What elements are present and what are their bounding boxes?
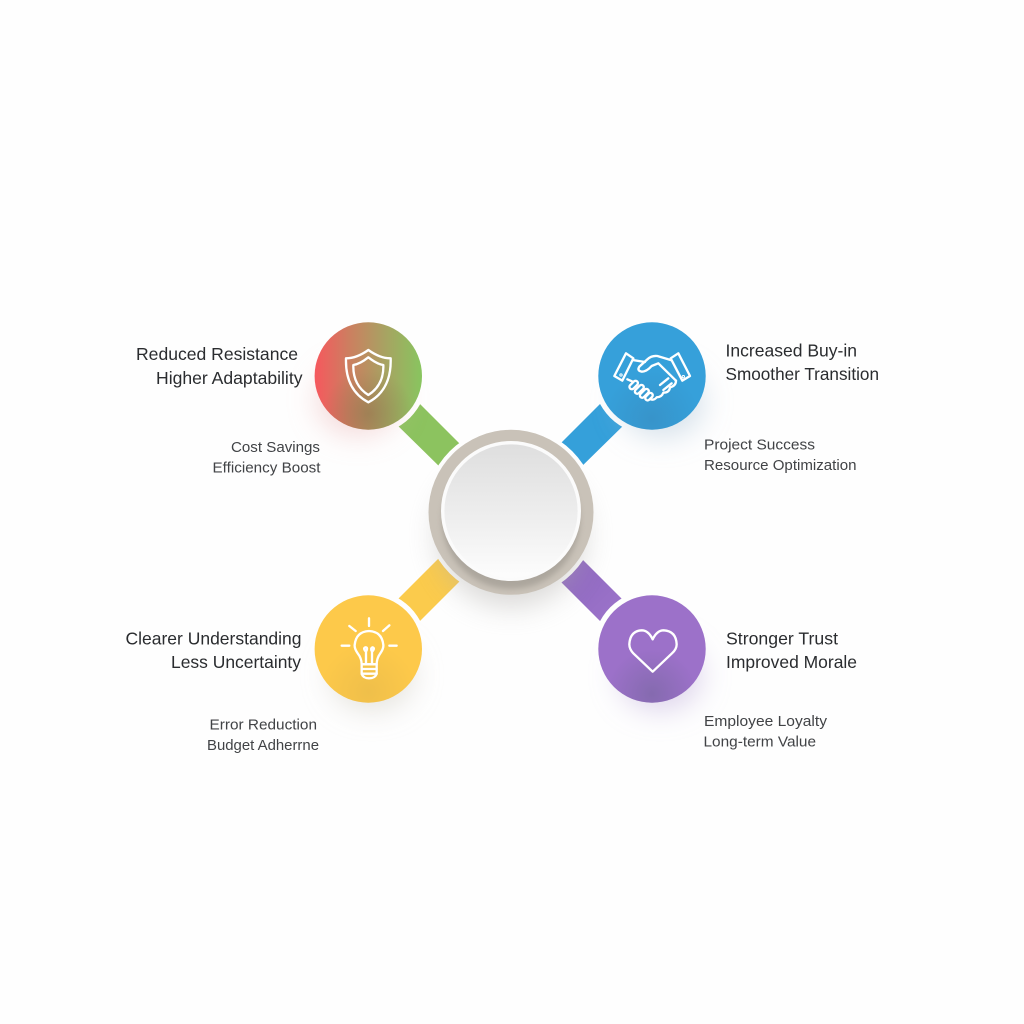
node circle [315,322,422,430]
text: resistance headings [136,344,303,388]
text: understanding headings: Less Uncertainty [171,652,301,672]
hub disc [443,443,579,579]
text: trust details: Employee Loyalty [704,713,827,730]
connector: green [391,396,466,472]
panel: understanding node [126,595,422,754]
panel: buy-in node [598,322,879,474]
text: understanding headings [126,628,302,672]
text: resistance details: Cost Savings [231,439,320,456]
panel: resistance node [136,322,422,476]
text: trust details: Long-term Value [704,734,816,751]
text: understanding details: Error Reduction [210,716,317,733]
connector: purple [553,552,629,628]
text: buy-in details: Resource Optimization [704,457,856,474]
text: understanding details: Budget Adherrne [207,737,319,754]
icon: heart [629,630,677,672]
text: resistance headings: Reduced Resistance [136,344,298,364]
text: understanding details [207,716,319,754]
text: trust details [704,713,827,751]
text: buy-in headings: Increased Buy-in [726,340,857,360]
disc shadow [442,451,580,589]
node circle [598,322,706,430]
text: resistance details [212,439,321,476]
connector: yellow [391,552,467,628]
hub ring [428,430,594,595]
hub shadow [437,463,585,607]
panel: trust node [598,595,857,751]
icon: shield [346,350,391,402]
text: understanding headings: Clearer Understanding [126,628,302,648]
node shadows [316,364,704,711]
center hub [428,430,594,607]
text: trust headings [726,628,857,672]
connector: blue [553,397,629,473]
icon: handshake [614,353,690,401]
connector gaps [309,317,711,708]
text: trust headings: Stronger Trust [726,628,838,648]
text: buy-in headings: Smoother Transition [726,364,879,384]
text: buy-in headings [726,340,879,384]
text: resistance details: Efficiency Boost [212,460,321,476]
text: buy-in details: Project Success [704,436,815,453]
icon: light bulb [342,618,397,678]
text: trust headings: Improved Morale [726,652,857,672]
node circle [315,595,422,703]
node circle [598,595,706,703]
text: buy-in details [704,436,856,474]
text: resistance headings: Higher Adaptability [156,368,303,388]
